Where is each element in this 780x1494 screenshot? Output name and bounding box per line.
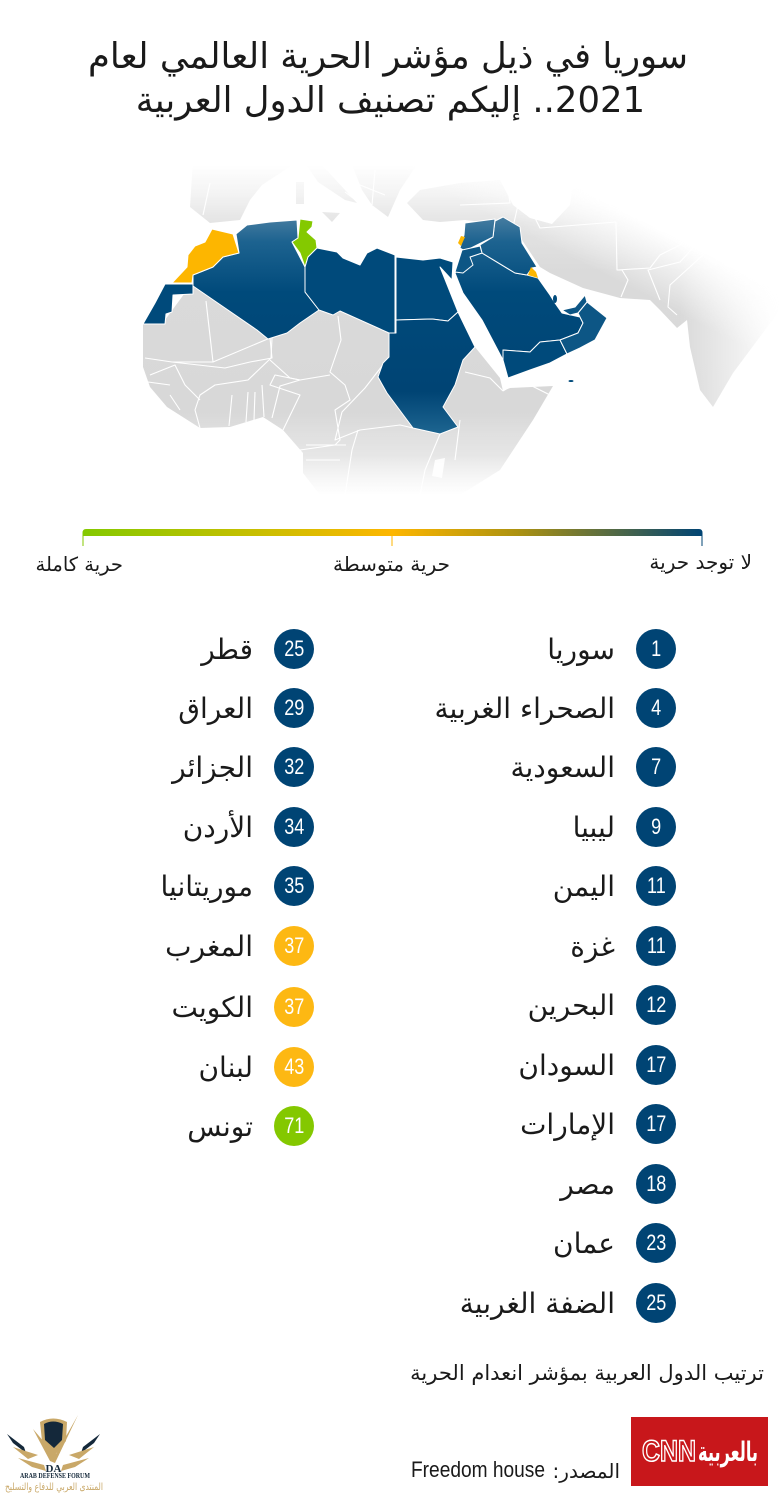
row: Saudi Arabia bbox=[510, 747, 676, 787]
row: Oman bbox=[553, 1223, 676, 1263]
ranking column: left bbox=[160, 629, 314, 1146]
logo: Arab Defense Forum: DA bbox=[46, 1463, 61, 1475]
Qatar bbox=[553, 295, 557, 303]
row: Egypt: مصر bbox=[560, 1168, 615, 1201]
row: Libya: 9 bbox=[651, 814, 661, 839]
row: Yemen bbox=[553, 866, 676, 906]
row: UAE: 17 bbox=[646, 1111, 666, 1136]
scale label: full freedom: حرية كاملة bbox=[36, 553, 123, 576]
row: Mauritania bbox=[160, 866, 314, 906]
row: Mauritania: 35 bbox=[284, 873, 304, 898]
row: Syria: سوريا bbox=[547, 633, 615, 666]
row: Qatar bbox=[200, 629, 314, 669]
scale bar bbox=[82, 529, 702, 546]
Kuwait bbox=[528, 267, 538, 278]
Lebanon bbox=[458, 236, 465, 246]
row: Lebanon: 43 bbox=[284, 1054, 304, 1079]
row: Jordan: الأردن bbox=[183, 811, 253, 844]
row: Morocco: المغرب bbox=[165, 930, 253, 963]
Iraq bbox=[480, 217, 537, 275]
row: Bahrain: 12 bbox=[646, 992, 666, 1017]
row: Gaza: غزة bbox=[570, 930, 615, 963]
row: Morocco bbox=[165, 926, 314, 966]
row: Syria bbox=[547, 629, 676, 669]
row: Kuwait bbox=[171, 987, 314, 1027]
row: UAE: الإمارات bbox=[520, 1108, 615, 1141]
logo: CNN Arabic: CNN bbox=[642, 1435, 696, 1468]
Saudi Arabia bbox=[455, 253, 583, 360]
Algeria bbox=[193, 220, 319, 339]
Libya bbox=[305, 248, 395, 333]
shield bbox=[40, 1418, 67, 1455]
row: Gaza: 11 bbox=[647, 933, 665, 958]
row: Bahrain: البحرين bbox=[528, 989, 615, 1022]
row: Saudi Arabia: 7 bbox=[651, 754, 661, 779]
row: UAE bbox=[520, 1104, 676, 1144]
row: Jordan bbox=[183, 807, 314, 847]
row: Algeria bbox=[170, 747, 314, 787]
row: Western Sahara: 4 bbox=[651, 695, 661, 720]
title bbox=[88, 36, 688, 121]
Morocco bbox=[172, 229, 239, 283]
row: Libya bbox=[573, 807, 676, 847]
Arab countries bbox=[143, 217, 607, 434]
row: Mauritania: موريتانيا bbox=[160, 870, 253, 903]
row: Lebanon: لبنان bbox=[198, 1051, 253, 1084]
row: West Bank: 25 bbox=[646, 1290, 666, 1315]
row: Tunisia: 71 bbox=[284, 1113, 304, 1138]
source: المصدر: bbox=[553, 1459, 620, 1483]
row: Libya: ليبيا bbox=[573, 811, 615, 844]
row: Iraq: 29 bbox=[284, 695, 304, 720]
row: West Bank bbox=[460, 1283, 676, 1323]
Egypt bbox=[396, 257, 458, 321]
row: Jordan: 34 bbox=[284, 814, 304, 839]
row: Sudan bbox=[518, 1045, 676, 1085]
ranking column: right bbox=[435, 629, 676, 1323]
Jordan bbox=[455, 246, 482, 273]
row: Algeria: الجزائر bbox=[172, 751, 253, 784]
row: Oman: 23 bbox=[646, 1230, 666, 1255]
row: Qatar: 25 bbox=[284, 636, 304, 661]
source: Freedom house bbox=[411, 1457, 545, 1482]
Western Sahara bbox=[143, 284, 193, 324]
note: ranking description: ترتيب الدول العربية بمؤشر انعدام الحرية bbox=[410, 1361, 764, 1385]
gray land base bbox=[143, 184, 755, 478]
row: Gaza bbox=[570, 926, 676, 966]
row: Qatar: قطر bbox=[201, 633, 253, 666]
row: Bahrain bbox=[528, 985, 676, 1025]
row: Oman: عمان bbox=[553, 1227, 615, 1260]
row: Tunisia bbox=[187, 1106, 314, 1146]
row: Kuwait: 37 bbox=[284, 994, 304, 1019]
Socotra bbox=[568, 380, 574, 382]
row: Sudan: السودان bbox=[518, 1049, 615, 1082]
legend: freedom scale bbox=[36, 529, 752, 576]
row: Iraq bbox=[178, 688, 314, 728]
row: Egypt: 18 bbox=[646, 1171, 666, 1196]
map: Arab world freedom classification bbox=[143, 184, 755, 478]
row: Yemen: 11 bbox=[647, 873, 665, 898]
wings bbox=[7, 1434, 26, 1453]
source bbox=[411, 1457, 620, 1483]
UAE bbox=[562, 295, 587, 315]
row: Western Sahara: الصحراء الغربية bbox=[435, 692, 615, 725]
title: سوريا في ذيل مؤشر الحرية العالمي لعام bbox=[88, 36, 688, 77]
Tunisia bbox=[292, 219, 317, 267]
row: Yemen: اليمن bbox=[553, 870, 615, 903]
scale label: medium freedom: حرية متوسطة bbox=[333, 552, 450, 576]
row: Saudi Arabia: السعودية bbox=[510, 751, 615, 784]
logo: Arab Defense Forum bbox=[5, 1416, 103, 1493]
logo: CNN Arabic bbox=[631, 1417, 768, 1486]
row: Western Sahara bbox=[435, 688, 676, 728]
logo: Arab Defense Forum: ARAB DEFENSE FORUM bbox=[20, 1471, 90, 1480]
title: 2021.. إليكم تصنيف الدول العربية bbox=[136, 80, 645, 121]
country borders on gray bbox=[145, 170, 703, 495]
row: Egypt bbox=[559, 1164, 676, 1204]
Lake bbox=[432, 458, 445, 478]
Oman bbox=[560, 302, 607, 354]
row: Algeria: 32 bbox=[284, 754, 304, 779]
Yemen bbox=[503, 340, 567, 378]
row: Tunisia: تونس bbox=[187, 1110, 253, 1143]
row: Lebanon bbox=[198, 1047, 314, 1087]
scale label: no freedom: لا توجد حرية bbox=[649, 550, 752, 574]
row: Sudan: 17 bbox=[646, 1052, 666, 1077]
row: Morocco: 37 bbox=[284, 933, 304, 958]
row: West Bank: الضفة الغربية bbox=[460, 1287, 615, 1320]
row: Kuwait: الكويت bbox=[171, 991, 253, 1024]
Sudan bbox=[378, 312, 475, 434]
Syria bbox=[460, 219, 495, 251]
row: Iraq: العراق bbox=[178, 692, 253, 725]
row: Syria: 1 bbox=[651, 636, 661, 661]
